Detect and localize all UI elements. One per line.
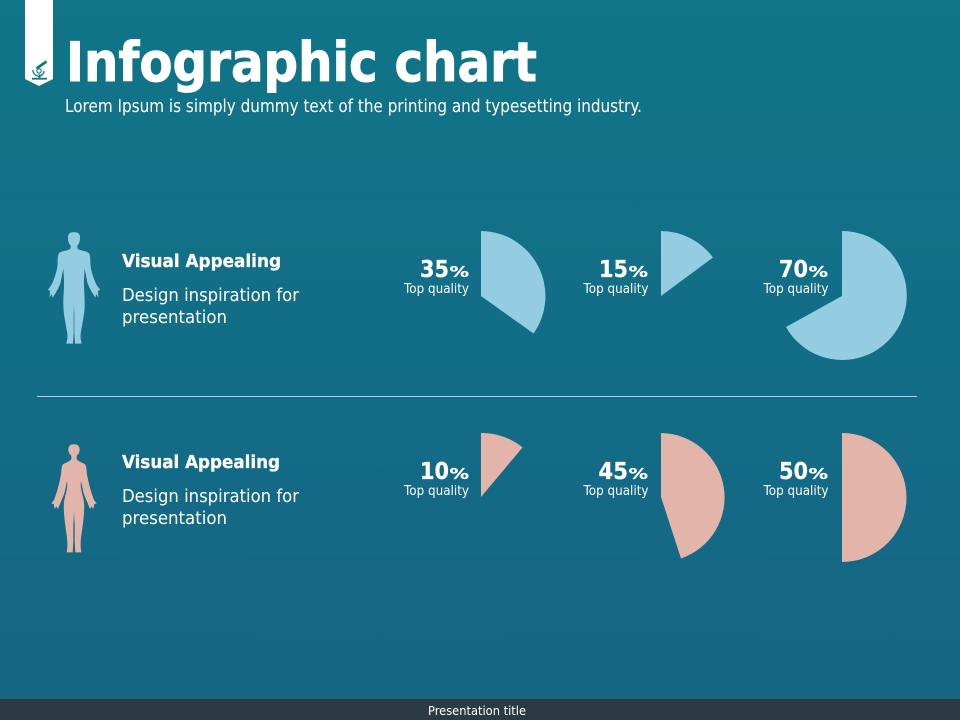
title: Infographic chart	[66, 31, 537, 94]
icon: female body silhouette	[51, 444, 97, 552]
row 2: female	[51, 433, 906, 562]
pie chart: 10%: %	[450, 465, 469, 483]
subtitle: Lorem Ipsum is simply dummy text of the printing and typesetting industry.	[65, 97, 642, 117]
heading: Visual Appealing: Visual Appealing	[122, 452, 280, 473]
pie chart: 35%: Top quality	[403, 282, 469, 297]
text block: description	[122, 487, 300, 529]
text block: description: presentation	[122, 308, 227, 328]
pie chart: 50%	[763, 433, 906, 562]
pie chart: 10%: 10	[420, 459, 449, 485]
pie chart: 10%: Top quality	[403, 484, 469, 499]
text block: description: presentation	[122, 509, 227, 529]
pie chart: 70%	[763, 231, 907, 360]
pie chart: 50%: %	[808, 465, 828, 483]
text block: description: Design inspiration for	[122, 286, 300, 306]
pie chart: 50%: Top quality	[763, 484, 829, 499]
pie chart: 35%: %	[450, 263, 469, 281]
pie chart: 70%: 70	[779, 257, 808, 283]
footer text: Presentation title	[428, 704, 526, 718]
text block: description	[122, 286, 300, 328]
pie chart: 45%: 45	[598, 459, 628, 485]
pie chart: 35%: 35	[420, 257, 449, 283]
heading: Visual Appealing: Visual Appealing	[122, 251, 281, 272]
pie chart: 70%: %	[808, 263, 828, 281]
pie chart: 70%: Top quality	[763, 282, 829, 297]
pie chart: 15%	[583, 231, 713, 297]
bookmark ribbon with microscope icon	[25, 0, 53, 86]
row 1: male	[48, 231, 907, 360]
pie chart: 45%: %	[628, 465, 648, 483]
pie chart: 45%: Top quality	[583, 484, 649, 499]
pie chart: 15%: Top quality	[583, 282, 649, 297]
pie chart: 35%	[403, 231, 545, 334]
footer bar	[0, 699, 960, 720]
pie chart: 15%: %	[628, 263, 648, 281]
pie chart: 10%	[403, 433, 522, 499]
pie chart: 15%: 15	[599, 257, 628, 283]
pie chart: 50%: 50	[779, 459, 808, 485]
icon: male body silhouette	[48, 232, 100, 344]
text block: description: Design inspiration for	[122, 487, 300, 507]
icon: microscope	[32, 62, 47, 79]
pie chart: 45%	[583, 433, 725, 558]
